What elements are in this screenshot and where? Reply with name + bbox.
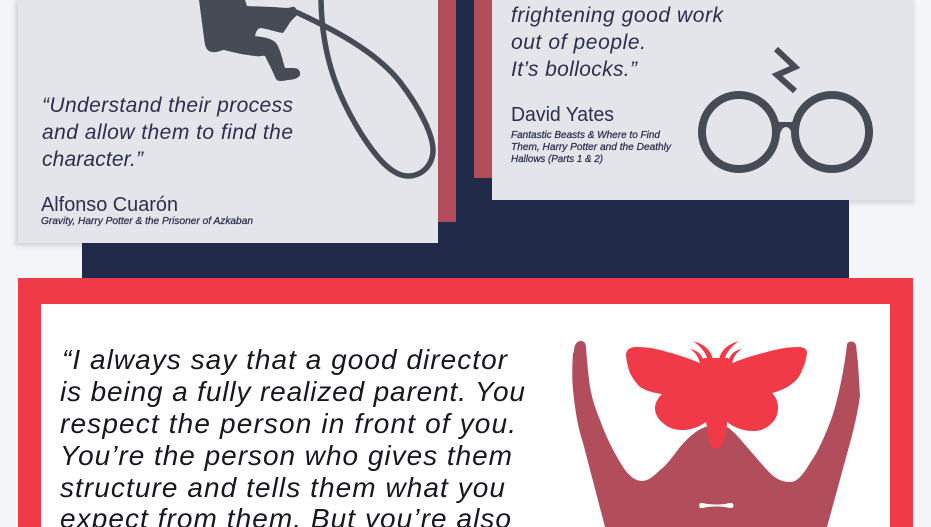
quote: Yates	[511, 4, 724, 81]
attribution: Yates: Hallows (Parts 1 & 2)	[511, 154, 603, 165]
quote: good director as parent: is being a fully realized parent. You	[60, 376, 525, 407]
quote: good director as parent: respect the person in front of you.	[60, 408, 516, 439]
attribution: Yates	[511, 103, 672, 165]
attribution: Cuarón: Gravity, Harry Potter & the Prisoner of Azkaban	[41, 216, 253, 227]
quote: Yates: It’s bollocks.”	[511, 58, 638, 81]
quote: Cuarón	[42, 94, 294, 171]
panel: featured red quote	[18, 278, 913, 527]
quote: good director as parent: You’re the person who gives them	[60, 440, 512, 471]
attribution: Cuarón	[41, 193, 253, 227]
panel: David Yates	[474, 0, 912, 200]
icon: silhouette swinging on a rope	[199, 0, 433, 176]
quote: Cuarón: and allow them to find the	[42, 121, 293, 144]
icon: round glasses and lightning scar	[702, 49, 869, 169]
navy backdrop	[82, 0, 849, 279]
attribution: Cuarón: Alfonso Cuarón	[41, 193, 178, 216]
quote: Cuarón: “Understand their process	[42, 94, 294, 117]
attribution: Yates: Them, Harry Potter and the Deathly	[511, 142, 672, 153]
quote: Yates: out of people.	[511, 31, 646, 54]
panel: Alfonso Cuarón	[18, 0, 456, 243]
quote: good director as parent	[60, 344, 525, 527]
quote: good director as parent: “I always say that a good director	[62, 344, 509, 375]
quote: good director as parent: structure and tells them what you	[60, 472, 505, 503]
attribution: Yates: David Yates	[511, 103, 614, 126]
quote: Cuarón: character.”	[42, 148, 144, 171]
attribution: Yates: Fantastic Beasts & Where to Find	[511, 130, 660, 141]
quote: Yates: frightening good work	[511, 4, 724, 27]
icon: face with moth over the mouth	[572, 341, 860, 527]
